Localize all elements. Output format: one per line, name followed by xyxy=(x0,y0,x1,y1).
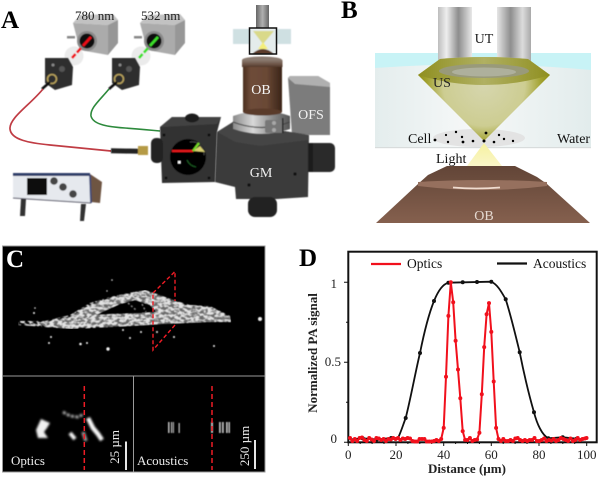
y-axis labels: 0.5 xyxy=(325,354,341,369)
label UT: UT xyxy=(475,32,494,47)
acoustics section image xyxy=(168,422,230,433)
panel D: line chart xyxy=(299,245,597,476)
label Water: Water xyxy=(557,132,590,147)
x-axis labels: 60 xyxy=(485,447,498,462)
legend optics: Optics xyxy=(407,256,442,271)
ultrasound transducer tube xyxy=(256,5,269,28)
label OB: OB xyxy=(251,83,271,98)
light cone xyxy=(467,143,502,166)
legend acoustics xyxy=(497,256,586,271)
inset water chamber xyxy=(233,29,291,54)
red cross-section plane xyxy=(153,272,175,350)
acoustics curve xyxy=(350,280,579,442)
optical fibre scanner OFS xyxy=(288,76,330,135)
scale bar 250 µm: 250 µm xyxy=(237,426,252,466)
black image background xyxy=(2,246,265,472)
red optical fibre xyxy=(10,89,111,151)
x-axis labels: 20 xyxy=(390,447,402,462)
optics curve xyxy=(350,282,586,442)
label Light: Light xyxy=(436,152,466,167)
label GM: GM xyxy=(250,166,273,181)
label Acoustics: Acoustics xyxy=(137,453,188,468)
water bath xyxy=(375,53,591,148)
scale bar 25 µm: 25 µm xyxy=(107,430,122,464)
x-axis labels: 100 xyxy=(577,447,596,462)
label OFS: OFS xyxy=(298,108,324,123)
532 nm laser xyxy=(132,14,185,66)
ultrasound cone US xyxy=(418,57,550,141)
label Optics: Optics xyxy=(11,453,45,468)
cell organelles xyxy=(434,131,514,143)
green optical fibre xyxy=(91,89,160,131)
legend optics xyxy=(371,256,442,271)
3D cell image xyxy=(18,290,231,329)
y-axis title: Normalized PA signal xyxy=(305,293,320,413)
label 780 nm: 780 nm xyxy=(75,8,114,23)
inset frame xyxy=(250,28,276,54)
red dashed line optics xyxy=(83,386,85,470)
optics section image xyxy=(36,412,102,441)
780 nm laser xyxy=(64,14,118,66)
scale bar 25 µm xyxy=(107,430,126,470)
x-axis labels xyxy=(345,447,596,462)
label US: US xyxy=(433,76,451,91)
objective OB xyxy=(233,56,290,134)
fibre connector xyxy=(111,146,148,155)
scattered bright points xyxy=(33,279,262,351)
panel A: experimental system xyxy=(1,5,335,221)
panel label A: A xyxy=(1,7,19,34)
x-axis labels: 0 xyxy=(345,447,352,462)
objective OB xyxy=(376,166,590,223)
ultrasound transducer UT xyxy=(438,7,531,63)
controller box xyxy=(13,173,102,221)
x-axis labels: 40 xyxy=(437,447,450,462)
label Cell: Cell xyxy=(408,132,431,147)
panel label D: D xyxy=(299,245,317,272)
scan head cube xyxy=(151,114,221,183)
x-axis labels: 80 xyxy=(532,447,546,462)
y-axis labels: 0 xyxy=(330,431,337,446)
galvanometer GM body xyxy=(215,122,335,217)
plot frame xyxy=(348,252,597,442)
panel label C: C xyxy=(6,246,24,273)
fibre coupler green xyxy=(109,58,140,90)
cell xyxy=(433,129,525,147)
panel B: schematic of focus xyxy=(341,0,591,224)
label OB: OB xyxy=(474,209,494,224)
panel C: images xyxy=(2,246,265,472)
y-axis labels xyxy=(325,276,341,446)
label 532 nm: 532 nm xyxy=(141,8,180,23)
x-axis title: Distance (µm) xyxy=(428,461,506,476)
y-axis labels: 1 xyxy=(330,276,337,291)
fibre coupler red xyxy=(42,58,73,90)
axis ticks xyxy=(344,282,587,446)
red dashed line acoustics xyxy=(211,386,213,470)
legend acoustics: Acoustics xyxy=(533,256,586,271)
dividers xyxy=(3,376,265,472)
